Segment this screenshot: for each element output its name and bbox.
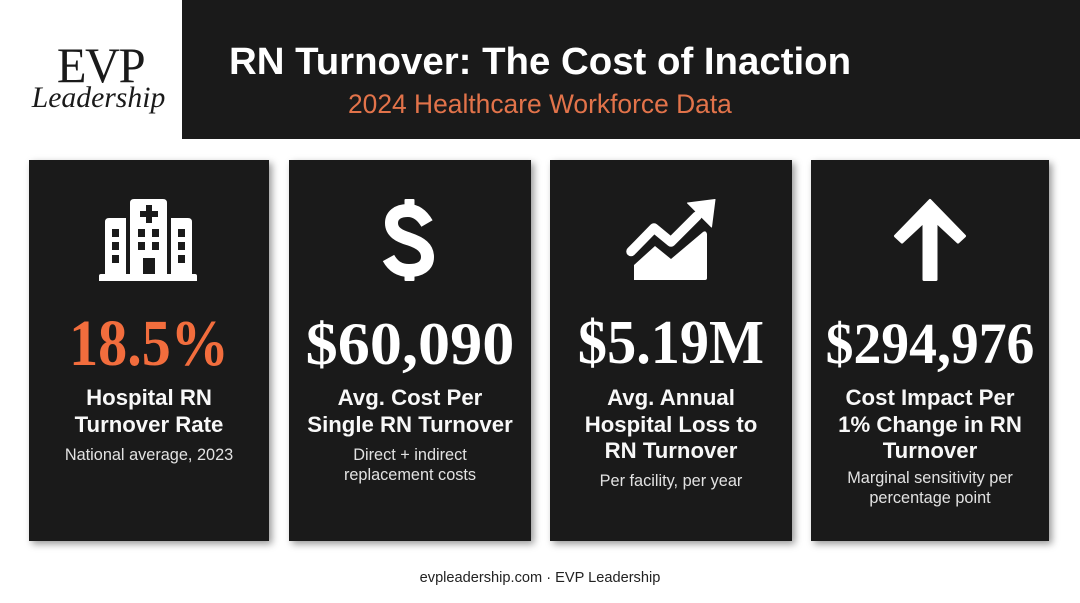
note: Per facility, per year	[600, 472, 742, 490]
note	[344, 446, 476, 484]
value: $294,976	[826, 311, 1034, 376]
label: Turnover Rate	[75, 412, 223, 436]
note: replacement costs	[344, 466, 476, 484]
icon: dollar	[382, 199, 434, 281]
label	[74, 385, 223, 436]
subtitle: 2024 Healthcare Workforce Data	[348, 89, 732, 119]
icon: hospital	[99, 199, 197, 281]
note: National average, 2023	[65, 446, 233, 464]
note: Marginal sensitivity per	[847, 469, 1013, 487]
header banner	[182, 0, 1080, 139]
label	[585, 385, 757, 463]
icon: up arrow	[894, 198, 966, 281]
logo: EVP	[57, 37, 144, 93]
note: percentage point	[869, 489, 991, 507]
panel: turnover rate	[29, 160, 269, 541]
note	[847, 469, 1013, 507]
label	[838, 385, 1022, 463]
panel: cost per turnover	[289, 160, 531, 541]
label: RN Turnover	[605, 438, 737, 463]
icon: rising chart	[626, 199, 716, 280]
label: Hospital Loss to	[585, 412, 757, 436]
label	[307, 385, 513, 436]
footer: evpleadership.com · EVP Leadership	[420, 570, 660, 586]
label: Turnover	[883, 438, 977, 463]
title: RN Turnover: The Cost of Inaction	[229, 40, 851, 83]
logo: Leadership	[32, 82, 165, 114]
note: Direct + indirect	[353, 446, 467, 464]
label: Single RN Turnover	[307, 412, 513, 436]
value: $60,090	[306, 311, 514, 377]
label: Avg. Cost Per	[338, 385, 482, 410]
logo	[31, 37, 165, 114]
label: Avg. Annual	[607, 385, 735, 410]
label: 1% Change in RN	[838, 412, 1022, 436]
panel: annual loss	[550, 160, 792, 541]
value: $5.19M	[578, 309, 764, 377]
label: Hospital RN	[86, 385, 212, 410]
value: 18.5%	[69, 307, 229, 380]
panel: cost impact	[811, 160, 1049, 541]
label: Cost Impact Per	[846, 385, 1014, 410]
